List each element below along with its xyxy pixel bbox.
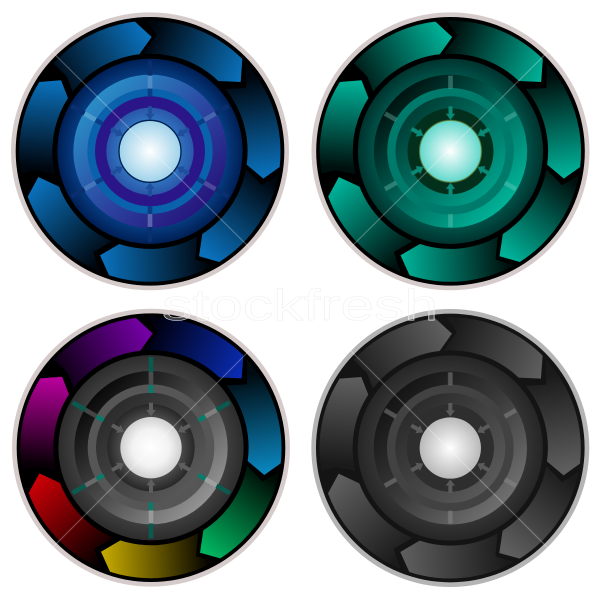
grey inward arrows xyxy=(409,403,492,493)
green inward arrows xyxy=(409,106,492,196)
rainbow core xyxy=(120,417,182,478)
grey concentric rings xyxy=(358,355,543,541)
grey spokes xyxy=(384,372,517,524)
grey rim xyxy=(311,309,589,587)
blue spokes xyxy=(70,61,230,242)
wheel: green xyxy=(312,12,589,290)
green core xyxy=(420,120,481,182)
rainbow inward arrows xyxy=(110,403,192,493)
wheel: grey xyxy=(311,309,589,587)
wheel: rainbow xyxy=(12,309,290,587)
rainbow backing disc xyxy=(17,313,285,582)
green outer arrows xyxy=(320,21,581,282)
blue inward arrows xyxy=(109,106,191,196)
rainbow spokes xyxy=(71,357,231,538)
green spokes xyxy=(384,76,517,227)
grey core xyxy=(420,417,481,479)
rainbow outer arrows xyxy=(20,317,282,578)
watermark text: stockfresh xyxy=(162,281,438,330)
blue rim xyxy=(11,12,289,290)
green rim xyxy=(312,12,589,290)
blue core xyxy=(119,120,181,182)
blue outer arrows xyxy=(19,21,281,282)
rainbow rim xyxy=(12,309,290,587)
blue backing disc xyxy=(16,17,284,286)
grey backing disc xyxy=(316,314,585,582)
rainbow concentric rings xyxy=(58,355,244,540)
blue concentric rings xyxy=(57,59,243,244)
wheel: blue xyxy=(11,12,289,290)
green backing disc xyxy=(316,17,585,286)
grey outer arrows xyxy=(320,317,581,579)
green concentric rings xyxy=(358,59,543,244)
